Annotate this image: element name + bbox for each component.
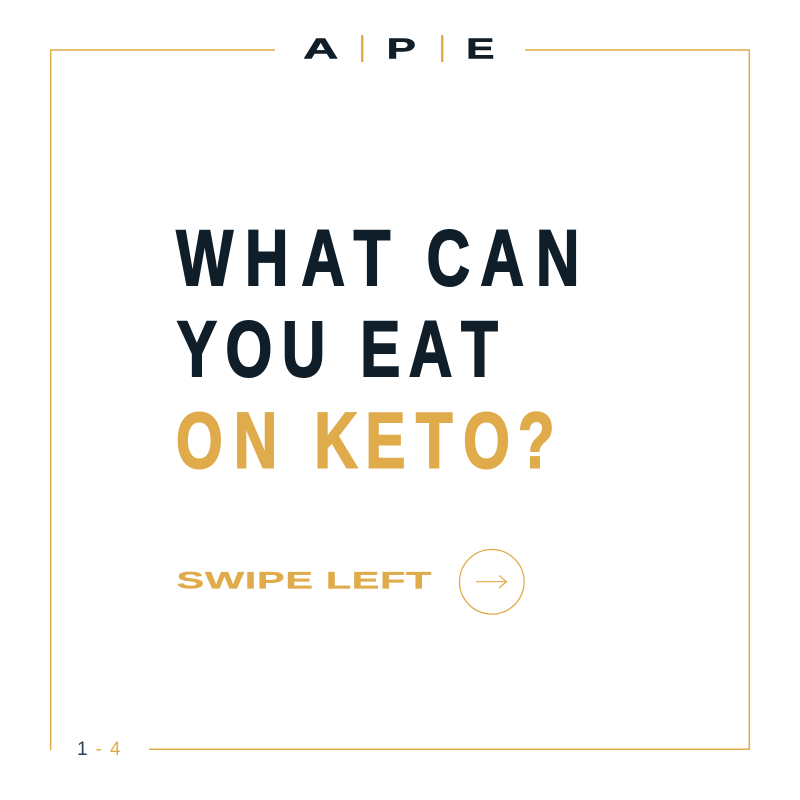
heading line: WHAT CAN: WHAT CAN — [176, 213, 579, 302]
logo: A P E — [303, 32, 495, 65]
frame border — [51, 50, 749, 750]
heading line: ON KETO?: ON KETO? — [176, 395, 555, 484]
arrow button — [460, 550, 524, 614]
logo: A P E: E — [466, 33, 495, 65]
heading line: YOU EAT: YOU EAT — [177, 304, 498, 393]
swipe left label: SWIPE LEFT — [176, 567, 432, 594]
heading — [176, 213, 579, 484]
logo: A P E: A — [303, 34, 338, 65]
page number: 1 - 4 — [77, 739, 121, 760]
logo: A P E: P — [386, 32, 416, 65]
